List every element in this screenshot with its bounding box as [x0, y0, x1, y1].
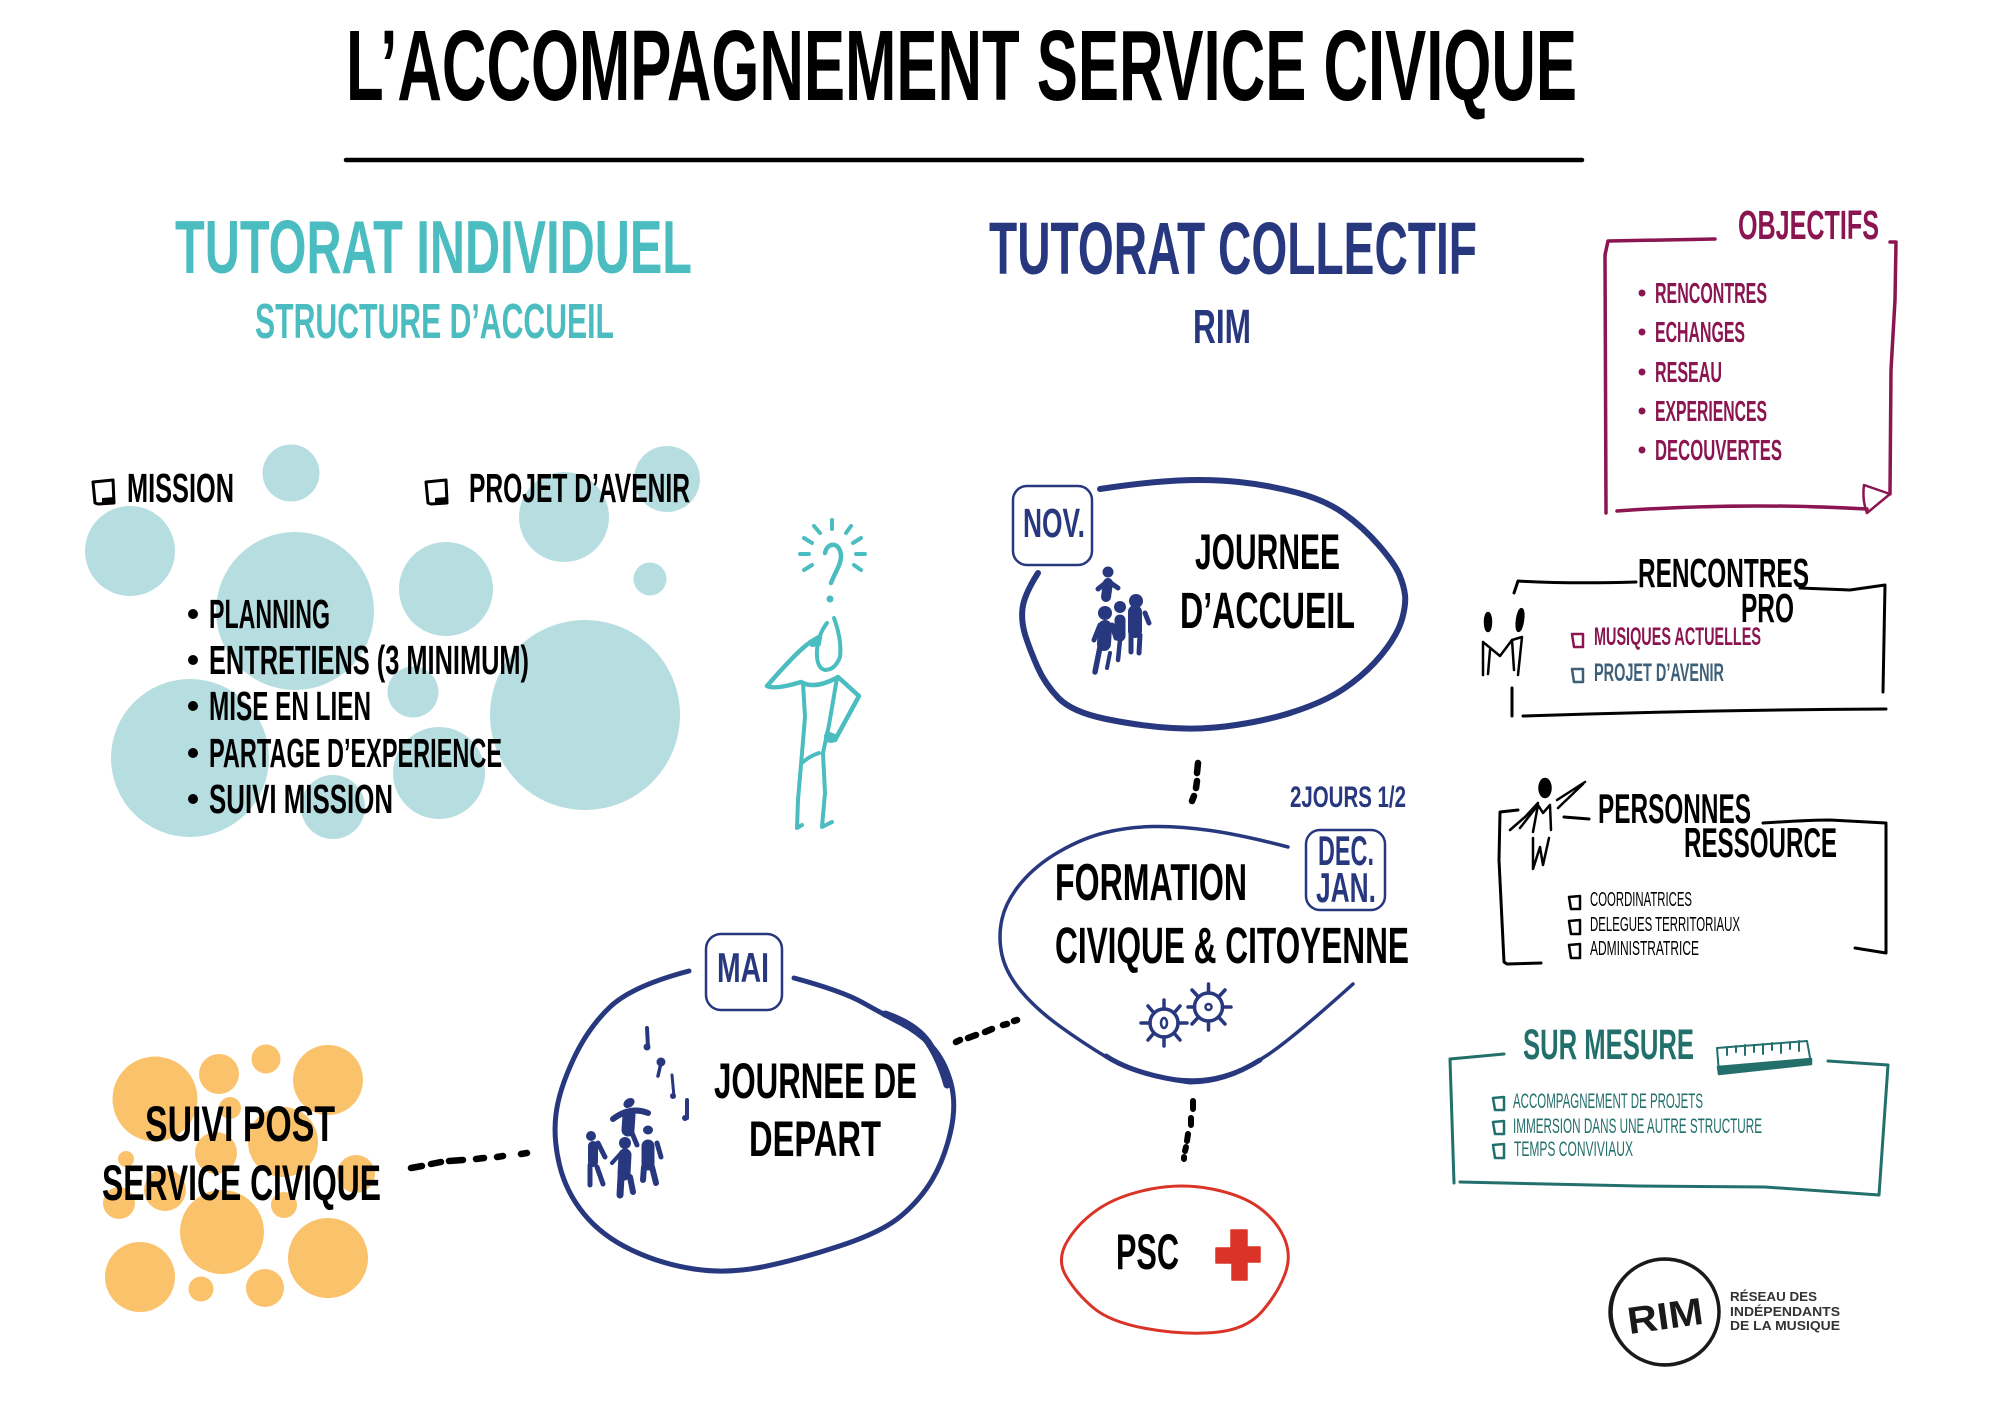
panel: psc	[1061, 1186, 1288, 1333]
panel: sur mesure	[1450, 1021, 1888, 1195]
heading: tutorat collectif: TUTORAT COLLECTIF	[989, 207, 1477, 290]
checkbox list: sur mesure: TEMPS CONVIVIAUX	[1514, 1138, 1633, 1161]
arrow: dotted link formation to psc	[1184, 1101, 1193, 1159]
heading: tutorat individuel: STRUCTURE D’ACCUEIL	[255, 295, 614, 349]
panel: suivi post service civique: SUIVI POST	[145, 1096, 335, 1152]
logo: RIM: RIM	[1625, 1291, 1706, 1343]
badge: nov: NOV.	[1023, 500, 1085, 546]
bullet list: individual tutoring: PLANNING	[209, 591, 330, 637]
checkbox list: sur mesure: IMMERSION DANS UNE AUTRE STRUCTURE	[1513, 1115, 1762, 1138]
panel: personnes ressource	[1499, 779, 1886, 964]
panel: journee de depart	[555, 934, 954, 1271]
panel: rencontres pro: RENCONTRES	[1638, 550, 1809, 596]
icon: handshake	[1483, 609, 1525, 675]
checkbox item: projet d'avenir: PROJET D’AVENIR	[1594, 659, 1724, 687]
label: formation civique et citoyenne: FORMATION	[1055, 854, 1247, 912]
icon: group of people	[1094, 566, 1149, 672]
bullet list: objectifs: RESEAU	[1655, 357, 1722, 389]
checkbox item: musiques actuelles	[1572, 623, 1761, 651]
icon: gears	[1141, 984, 1231, 1046]
arrow: dotted link depart to formation	[956, 1020, 1017, 1042]
label: journee d'accueil: JOURNEE	[1195, 524, 1340, 580]
panel: objectifs	[1605, 202, 1896, 513]
bullet list: objectifs: DECOUVERTES	[1655, 435, 1782, 467]
checkbox item: musiques actuelles: MUSIQUES ACTUELLES	[1594, 623, 1761, 651]
checkbox list: personnes ressource: COORDINATRICES	[1590, 889, 1692, 911]
logo: RIM	[1609, 1259, 1840, 1365]
label: journee d'accueil: D’ACCUEIL	[1180, 582, 1355, 639]
logo: RIM: RÉSEAU DES	[1730, 1289, 1817, 1304]
label: 2 jours 1/2: 2JOURS 1/2	[1290, 781, 1406, 814]
panel: individual tutoring bubbles	[85, 444, 700, 839]
badge: nov	[1013, 486, 1092, 565]
heading: tutorat collectif	[989, 207, 1477, 354]
arrow: dotted link suivi to journee de depart	[411, 1153, 527, 1168]
bullet list: objectifs: EXPERIENCES	[1655, 396, 1767, 428]
bullet list: individual tutoring: MISE EN LIEN	[209, 683, 371, 729]
label: journee d'accueil	[1180, 524, 1355, 639]
checkbox item: mission	[93, 465, 234, 511]
panel: suivi post service civique: SERVICE CIVIQUE	[102, 1155, 381, 1211]
checkbox list: personnes ressource	[1569, 889, 1740, 960]
badge: dec jan: JAN.	[1316, 864, 1376, 911]
label: journee de depart: DEPART	[749, 1111, 881, 1167]
heading: tutorat collectif: RIM	[1193, 301, 1251, 354]
checkbox item: mission: MISSION	[127, 465, 234, 511]
panel: psc: PSC	[1116, 1224, 1179, 1280]
bullet list: objectifs: RENCONTRES	[1655, 278, 1767, 310]
badge: dec jan	[1306, 827, 1385, 911]
checkbox list: sur mesure	[1493, 1090, 1762, 1161]
bullet list: individual tutoring: ENTRETIENS (3 MINIMUM)	[209, 637, 529, 683]
panel: journee d'accueil	[1013, 480, 1405, 729]
checkbox item: projet d'avenir	[426, 465, 690, 511]
icon: group of people with music notes	[586, 1028, 688, 1195]
label: journee de depart: JOURNEE DE	[714, 1053, 917, 1109]
bullet list: individual tutoring: SUIVI MISSION	[209, 776, 393, 822]
panel: formation civique et citoyenne	[1000, 826, 1409, 1082]
badge: mai: MAI	[717, 944, 769, 991]
logo: RIM: DE LA MUSIQUE	[1730, 1318, 1840, 1333]
checkbox list: personnes ressource: ADMINISTRATRICE	[1590, 938, 1699, 960]
heading: tutorat individuel: TUTORAT INDIVIDUEL	[175, 205, 692, 289]
panel: suivi post service civique	[102, 1044, 381, 1312]
checkbox item: projet d'avenir: PROJET D’AVENIR	[469, 465, 690, 511]
checkbox list: personnes ressource: DELEGUES TERRITORIAUX	[1590, 914, 1740, 936]
panel: objectifs: OBJECTIFS	[1738, 202, 1879, 248]
arrow: dotted link accueil to formation	[1192, 763, 1198, 801]
icon: red cross	[1216, 1230, 1260, 1280]
panel: personnes ressource: PERSONNES	[1598, 785, 1751, 832]
panel: personnes ressource: RESSOURCE	[1684, 819, 1837, 866]
checkbox item: projet d'avenir	[1572, 659, 1724, 687]
panel: sur mesure: SUR MESURE	[1523, 1021, 1694, 1069]
bullet list: objectifs	[1638, 278, 1782, 467]
panel: rencontres pro	[1483, 550, 1886, 716]
label: formation civique et citoyenne	[1055, 854, 1409, 974]
checkbox list: sur mesure: ACCOMPAGNEMENT DE PROJETS	[1513, 1090, 1703, 1113]
badge: dec jan: DEC.	[1318, 827, 1374, 874]
logo: RIM: INDÉPENDANTS	[1730, 1304, 1840, 1319]
label: journee de depart	[714, 1053, 917, 1167]
badge: mai	[706, 934, 782, 1010]
icon: thinking person with question mark	[767, 520, 865, 828]
label: formation civique et citoyenne: CIVIQUE & CITOYENNE	[1055, 917, 1409, 974]
panel: rencontres pro: PRO	[1741, 585, 1794, 631]
bullet list: individual tutoring: PARTAGE D’EXPERIENCE	[209, 730, 502, 776]
icon: person pointing	[1510, 779, 1585, 869]
heading: tutorat individuel	[175, 205, 692, 349]
icon: ruler	[1717, 1041, 1811, 1074]
bullet list: individual tutoring	[188, 591, 529, 822]
bullet list: objectifs: ECHANGES	[1655, 317, 1745, 349]
